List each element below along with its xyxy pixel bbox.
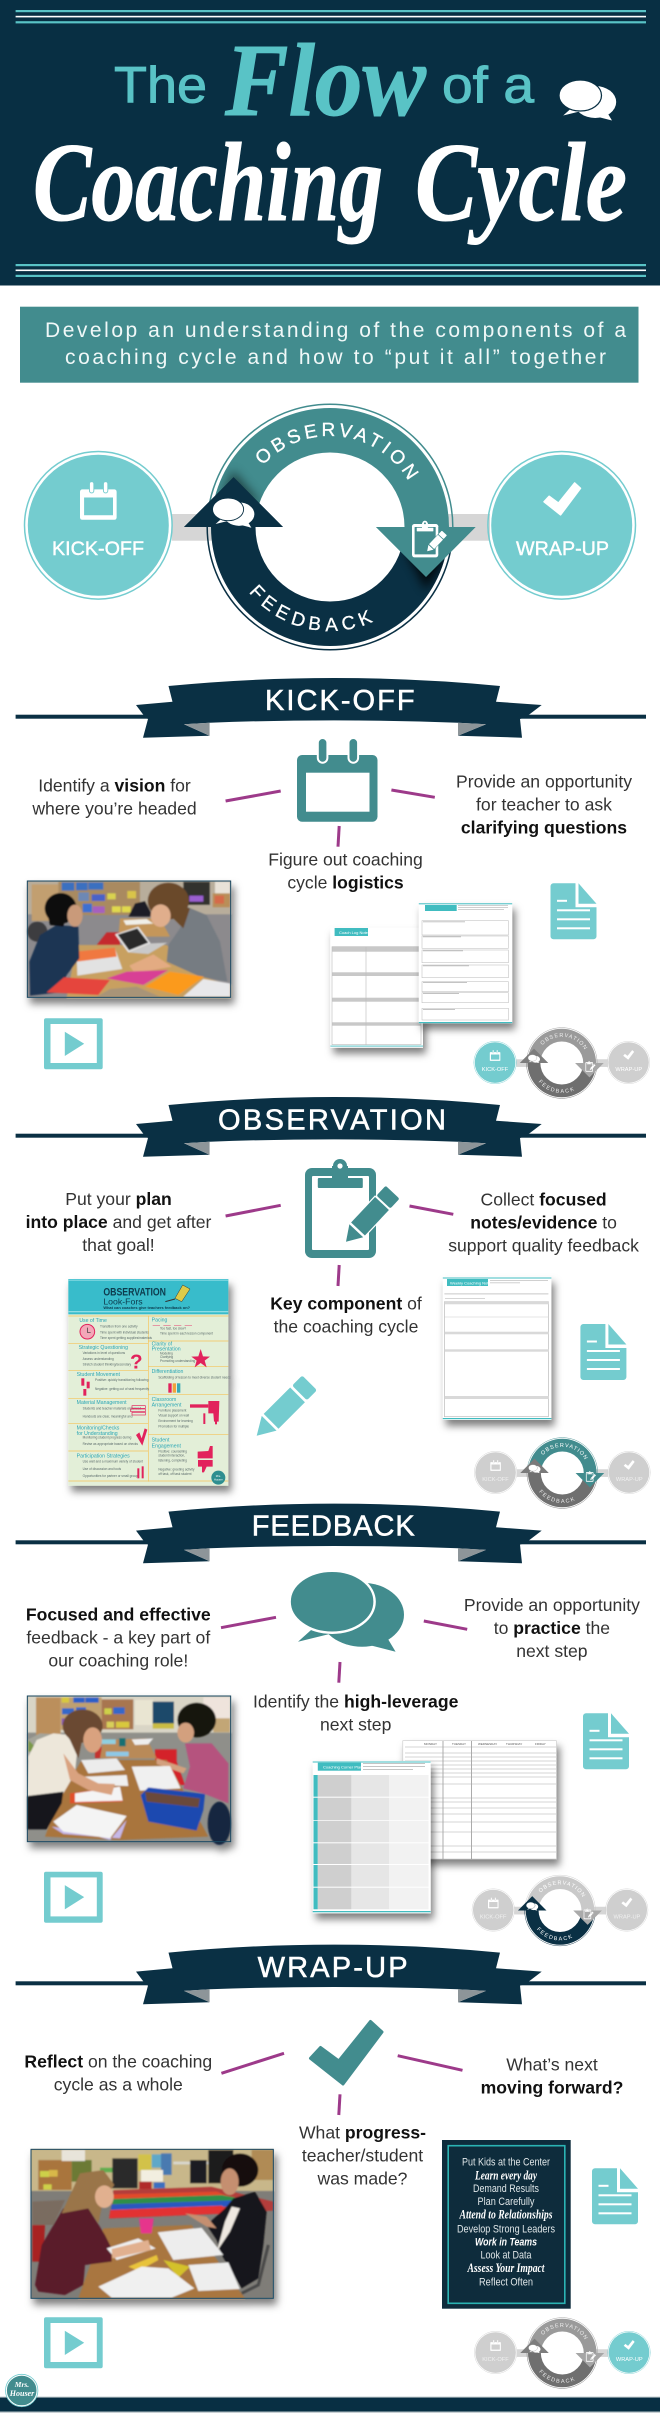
title: The [114, 57, 207, 114]
arrow shadows [184, 470, 476, 590]
poster body text: Time spent getting supplies/materials [100, 1336, 152, 1340]
poster body text: Monitoring student progress during [83, 1435, 132, 1439]
poster headings left: Monitoring/Checks [77, 1425, 120, 1431]
poster headings left: Student Movement [77, 1372, 121, 1378]
poster body text: Modeling [160, 1351, 173, 1355]
header panel [0, 0, 660, 286]
poster headings right: Arrangement [152, 1403, 182, 1409]
text: put your plan: that goal! [82, 1235, 155, 1255]
connector lines: feedback [221, 1617, 467, 1683]
photo: wrap-up conversation [31, 2149, 273, 2298]
poster body text: Time spent in each lesson component [160, 1331, 213, 1335]
poster body text: listening, completing [158, 1459, 187, 1463]
text: focused and effective: Focused and effective [26, 1605, 211, 1625]
poster body text: Variations in level of questions [83, 1351, 125, 1355]
mini cycle: kick-off active: WRAP-UP [615, 1067, 643, 1073]
poster: observation look-fors [68, 1279, 231, 1486]
text: focused and effective: feedback - a key part of [26, 1628, 210, 1648]
poster body text: off task, off task student [158, 1472, 192, 1476]
icon: check mark [310, 2022, 382, 2084]
text: what progress: What progress- [299, 2122, 426, 2142]
poster icons: ? [130, 1351, 143, 1374]
document thumbnail: weekly schedule: MONDAY [424, 1742, 437, 1746]
poster heading: OBSERVATION [103, 1287, 166, 1299]
logo: Mrs. Houser [6, 2374, 38, 2407]
text: what's next: What’s next [506, 2054, 598, 2074]
document thumbnail: weekly coaching notes [443, 1277, 551, 1420]
poster: observation look-fors: Look-Fors [103, 1296, 143, 1306]
text: what's next: moving forward? [481, 2077, 623, 2097]
text: logistics: cycle logistics [287, 872, 404, 892]
mini cycle: wrap-up active: FEEDBACK [539, 2370, 575, 2383]
text: put your plan: Put your plan [65, 1189, 172, 1209]
mini cycle: kick-off active: OBSERVATION [540, 1033, 588, 1050]
footer bar [0, 2397, 660, 2413]
card: reflection list: Look at Data [480, 2250, 532, 2262]
poster body text [83, 1325, 231, 1478]
poster body text: Students and teacher materials organized [83, 1407, 141, 1411]
poster headings left: for Understanding [77, 1431, 118, 1437]
section banner: kick-off: KICK-OFF [265, 685, 415, 717]
document thumbnail: coaching corner plan: Coaching Corner Plan [323, 1764, 362, 1770]
label: observation arc: OBSERVATION [256, 422, 419, 480]
poster headings right [152, 1318, 184, 1449]
label: wrap-up: WRAP-UP [516, 539, 609, 560]
poster headings left: Strategic Questioning [79, 1345, 128, 1351]
poster headings right: Student [152, 1438, 170, 1444]
mini cycle: observation active [474, 1437, 650, 1509]
section banner: feedback: FEEDBACK [252, 1511, 415, 1543]
poster headings left [77, 1318, 130, 1460]
section banner: kick-off [16, 678, 646, 738]
document thumbnail: weekly schedule: FRIDAY [535, 1742, 546, 1746]
card: reflection list: Learn every day [474, 2167, 537, 2182]
poster headings left: Material Management [77, 1400, 127, 1406]
document thumbnail: weekly schedule: WEDNESDAY [478, 1742, 497, 1746]
poster body text: Assess understanding [83, 1357, 114, 1361]
text: reflect: Reflect on the coaching [24, 2052, 212, 2072]
card: reflection list: Attend to Relationships [459, 2206, 552, 2221]
photo: feedback conversation [27, 1696, 231, 1845]
section banner: wrap-up: WRAP-UP [258, 1952, 408, 1984]
mini cycle: observation active: OBSERVATION [541, 1443, 588, 1460]
text: key component: Key component of [270, 1293, 422, 1313]
poster headings right: Clarity of [152, 1341, 173, 1347]
poster body text: Time spent with individual students [100, 1331, 149, 1335]
card: reflection list: Assess Your Impact [467, 2260, 545, 2275]
poster body text: Positive: counselling [158, 1449, 187, 1453]
poster body text: Visual support on wall [158, 1414, 189, 1418]
logo: Mrs. Houser: Mrs. [14, 2380, 29, 2389]
title [33, 23, 627, 245]
text: reflect: cycle as a whole [54, 2075, 183, 2095]
icon: document [592, 2168, 638, 2224]
mini cycle: kick-off active: KICK-OFF [482, 1067, 509, 1073]
poster icons [80, 1324, 225, 1485]
mini cycle: observation active: WRAP-UP [616, 1477, 643, 1483]
intro banner: Develop an understanding of the components of a [45, 319, 626, 342]
cycle diagram [24, 404, 636, 650]
poster headings right: Differentiation [152, 1369, 184, 1375]
text: what progress: teacher/student [302, 2145, 423, 2165]
icon: play video [44, 2317, 103, 2368]
connector lines: observation [226, 1205, 453, 1286]
label: feedback arc: FEEDBACK [250, 584, 374, 632]
poster: observation look-fors: What can coaches give teachers feedback on? [103, 1306, 191, 1310]
poster body text: Opportunities for partner or small group [83, 1474, 138, 1478]
icon: clipboard and pencil [305, 1159, 400, 1258]
poster body text: Negative: greeting activity [158, 1467, 195, 1471]
text: logistics: Figure out coaching [268, 850, 423, 870]
document thumbnail: planning questions [419, 903, 512, 1023]
mini cycle: wrap-up active: OBSERVATION [541, 2323, 588, 2340]
mini cycle: wrap-up active: WRAP-UP [616, 2357, 643, 2363]
poster body text: Promotion for multiple [158, 1425, 189, 1429]
text: clarifying questions: Provide an opportunity [456, 772, 632, 792]
card: reflection list [442, 2140, 571, 2309]
card: reflection list: Work in Teams [475, 2237, 537, 2249]
poster body text: Use of discussion and tools [83, 1467, 122, 1471]
document thumbnail: weekly coaching notes: Weekly Coaching Notes [450, 1280, 493, 1286]
text: what progress: was made? [317, 2168, 408, 2188]
card: reflection list: Reflect Often [479, 2277, 533, 2289]
icon: speech bubbles [559, 80, 616, 120]
document thumbnail: coaching log: Coach Log Notes [339, 930, 370, 935]
photo: kick-off coaching conversation [27, 881, 231, 997]
text: practice next step: Provide an opportunity [464, 1595, 640, 1615]
text: focused and effective: our coaching role! [48, 1651, 188, 1671]
card: reflection list: Develop Strong Leaders [457, 2223, 555, 2235]
icon: pencil [249, 1375, 317, 1443]
mini cycle: feedback active: WRAP-UP [614, 1915, 641, 1921]
card: reflection list: Put Kids at the Center [462, 2157, 550, 2169]
mini cycle: feedback active: OBSERVATION [538, 1880, 586, 1897]
poster body text: Positive: quickly transitioning following [95, 1378, 149, 1382]
poster body text: Stretch student thinking/secondary [83, 1363, 132, 1367]
text: practice next step: to practice the [494, 1618, 610, 1638]
poster icons: Houser [214, 1477, 223, 1481]
connector lines: wrap-up [221, 2053, 462, 2115]
icon: calendar [297, 738, 378, 822]
card: reflection list: Demand Results [473, 2183, 539, 2195]
poster headings right: Engagement [152, 1443, 181, 1449]
poster headings right: Pacing [152, 1318, 168, 1324]
poster body text: Environment for learning [158, 1419, 193, 1423]
document thumbnail: weekly schedule: TUESDAY [452, 1742, 466, 1746]
text: collect focused notes: notes/evidence to [470, 1213, 617, 1233]
icon: document [583, 1713, 629, 1769]
text: high-leverage next step: next step [320, 1714, 392, 1734]
poster body text: student interaction, [158, 1454, 185, 1458]
mini cycle: feedback active [472, 1874, 648, 1946]
intro banner [20, 307, 638, 383]
section banner: observation [16, 1097, 646, 1157]
section banner: feedback [16, 1504, 646, 1563]
text: identify a vision: where you’re headed [31, 799, 197, 819]
mini cycle: feedback active: FEEDBACK [537, 1927, 572, 1940]
card: reflection list: Plan Carefully [478, 2196, 535, 2208]
title: Coaching [33, 121, 383, 245]
icon: document [550, 883, 596, 939]
text: collect focused notes: Collect focused [481, 1189, 607, 1209]
poster body text: Clarifying [160, 1355, 173, 1359]
text: clarifying questions: for teacher to ask [476, 795, 612, 815]
text: collect focused notes: support quality feedback [448, 1236, 639, 1256]
text: identify a vision: Identify a vision for [38, 776, 191, 796]
poster headings right: Classroom [152, 1397, 176, 1403]
title: Flow [224, 23, 427, 138]
label: kick-off: KICK-OFF [52, 539, 144, 560]
mini cycle: observation active: KICK-OFF [482, 1477, 509, 1483]
icon: speech bubbles [290, 1571, 404, 1652]
poster body text: Promoting understanding [160, 1359, 196, 1363]
mini cycle: kick-off active: FEEDBACK [538, 1080, 574, 1093]
poster body text: Handouts are clear, meaningful and [83, 1415, 133, 1419]
poster body text: Transition from one activity [100, 1325, 138, 1329]
connector lines: kick-off [226, 790, 435, 847]
mini cycle: wrap-up active [474, 2317, 650, 2389]
document thumbnail: coaching log [330, 928, 423, 1048]
mini cycle: wrap-up active: KICK-OFF [482, 2357, 509, 2363]
intro banner: coaching cycle and how to “put it all” together [65, 346, 606, 369]
poster body text: Furniture placement [158, 1408, 187, 1412]
document thumbnail: weekly schedule [403, 1741, 556, 1859]
poster headings left: Participation Strategies [77, 1454, 130, 1460]
document thumbnail: weekly schedule: THURSDAY [506, 1742, 522, 1746]
section banner: observation: OBSERVATION [218, 1104, 446, 1136]
mini cycle: kick-off active [474, 1027, 650, 1099]
mini cycle: observation active: FEEDBACK [539, 1490, 575, 1503]
logo: Mrs. Houser: Houser [9, 2389, 35, 2398]
text: clarifying questions: clarifying questions [461, 817, 627, 837]
section banner: wrap-up [16, 1945, 646, 2004]
poster grid lines [68, 1316, 228, 1482]
poster body text: Scaffolding of lesson to meet diverse student needs [158, 1375, 231, 1379]
poster body text: Use wait and a maximum variety of student [83, 1459, 143, 1463]
poster icons: Mrs. [216, 1474, 221, 1478]
text: put your plan: into place and get after [26, 1212, 211, 1232]
poster headings left: Use of Time [79, 1318, 107, 1324]
poster body text: Too fast, too slow? [160, 1327, 186, 1331]
text: key component: the coaching cycle [274, 1316, 418, 1336]
poster body text: Negative: getting out of seat frequently [95, 1387, 149, 1391]
text: practice next step: next step [516, 1641, 588, 1661]
poster body text: Revise as appropriate based on checks [83, 1442, 138, 1446]
icon: document [580, 1324, 626, 1380]
title: of a [442, 57, 535, 114]
text: high-leverage next step: Identify the high-leverage [253, 1691, 458, 1711]
mini cycle: feedback active: KICK-OFF [480, 1915, 507, 1921]
icon: play video [44, 1018, 103, 1069]
poster headings right: Presentation [152, 1346, 181, 1352]
document thumbnail: coaching corner plan [313, 1761, 431, 1913]
icon: play video [44, 1872, 103, 1923]
